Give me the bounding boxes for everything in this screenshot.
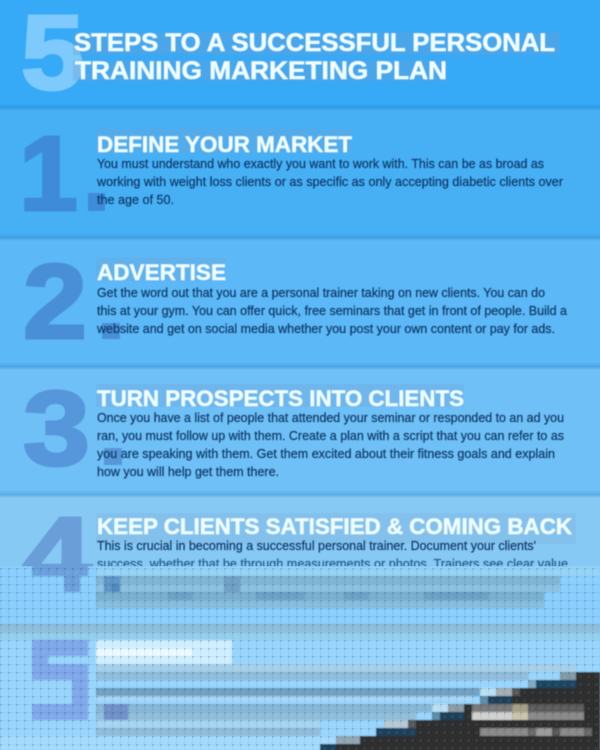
text: step 1 body: the age of 50.: [97, 192, 174, 207]
pixelated numeral 5: [32, 640, 88, 720]
panel: step 3 turn prospects into clients: [0, 362, 600, 495]
text: step 4 body: [97, 538, 568, 571]
heading: define your market: DEFINE YOUR MARKET: [97, 132, 353, 157]
numeral 1: [19, 115, 105, 233]
text: step 3 body: how you will help get them there.: [97, 464, 279, 479]
pixelated logo: [472, 704, 592, 736]
heading: turn prospects into clients: TURN PROSPECTS INTO CLIENTS: [97, 386, 464, 411]
heading: advertise: ADVERTISE: [97, 260, 226, 285]
title: [73, 29, 560, 85]
text: step 2 body: website and get on social media whether you post your own content or pay for ads.: [96, 321, 555, 336]
pixelated numeral 4 remainder: [32, 566, 88, 592]
panel: header: [0, 0, 600, 112]
numeral 1: 1: [19, 115, 78, 233]
panel: step 2 advertise: [0, 233, 600, 367]
numeral 4: 4: [22, 496, 92, 614]
pixelated step 5 heading: [96, 640, 232, 664]
numeral 3: [23, 370, 122, 488]
panel: step 4 keep clients satisfied: [0, 490, 600, 614]
mosaic background bands: [0, 566, 600, 750]
text: step 3 body: [97, 410, 564, 479]
text: step 2 body: Get the word out that you are a personal trainer taking on new clients. You can do: [97, 285, 545, 300]
text: step 3 body: you are speaking with them. Get them excited about their fitness goals and explain: [97, 446, 555, 461]
numeral 2: 2: [23, 243, 87, 361]
pixelated step 5 text: [96, 664, 576, 736]
text: step 1 body: You must understand who exactly you want to work with. This can be as broad as: [97, 156, 544, 171]
panel: pixelated lower section: [0, 566, 600, 750]
text: step 4 body: success, whether that be through measurements or photos. Trainers see clear value: [97, 556, 568, 571]
title: TRAINING MARKETING PLAN: [75, 57, 447, 85]
text: step 1 body: [96, 156, 564, 207]
text: step 3 body: Once you have a list of people that attended your seminar or responded to an ad you: [97, 410, 564, 425]
text: step 2 body: [96, 285, 568, 336]
dark corner: [320, 672, 600, 750]
heading: keep clients satisfied and coming back: KEEP CLIENTS SATISFIED & COMING BACK: [97, 514, 572, 539]
numeral 2: [23, 243, 120, 361]
text: step 2 body: this at your gym. You can offer quick, free seminars that get in front of people. Build a: [97, 303, 568, 318]
text: step 4 body: This is crucial in becoming a successful personal trainer. Document your clients': [97, 538, 536, 553]
text: step 1 body: working with weight loss clients or as specific as only accepting diabetic clients over: [96, 174, 564, 189]
pixelated step 4 text: [96, 576, 560, 608]
numeral 3: 3: [23, 370, 90, 488]
text: step 3 body: ran, you must follow up with them. Create a plan with a script that you can refer to as: [97, 428, 564, 443]
panel: step 1 define your market: [0, 103, 600, 238]
title: STEPS TO A SUCCESSFUL PERSONAL: [74, 29, 555, 57]
